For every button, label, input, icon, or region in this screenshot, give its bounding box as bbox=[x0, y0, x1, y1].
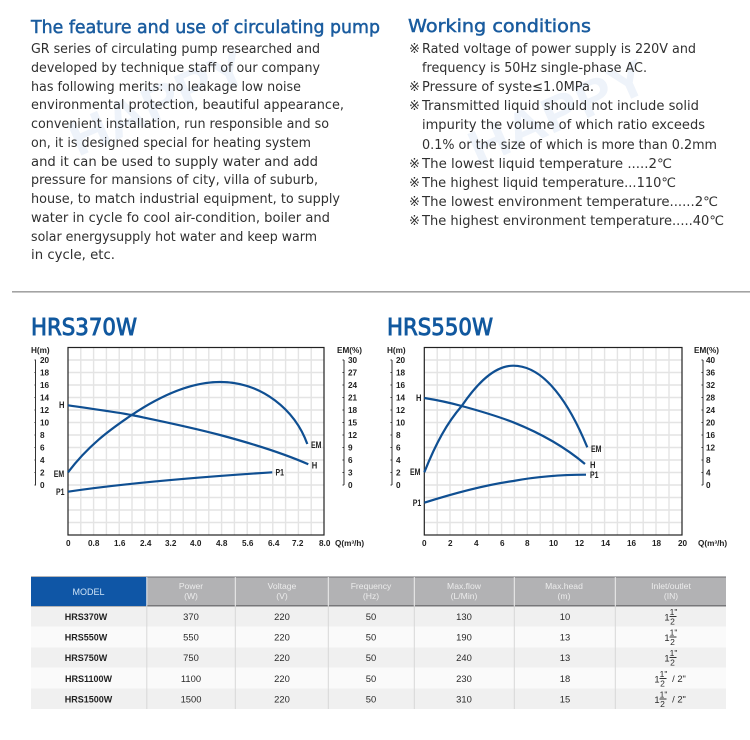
chart: HRS550W performance curves: 18 bbox=[396, 368, 406, 378]
text block: feature description: pressure for mansions of city, villa of suburb, bbox=[31, 173, 318, 188]
text block: feature description: environmental protection, beautiful appearance, bbox=[31, 98, 344, 113]
inlet/outlet fractions: 1" bbox=[670, 648, 677, 658]
text block: working conditions list: ※ bbox=[409, 99, 420, 114]
inlet/outlet fractions: / 2" bbox=[672, 694, 686, 704]
text block: working conditions list: impurity the volume of which ratio exceeds bbox=[422, 118, 705, 133]
chart: HRS370W performance curves: 14 bbox=[40, 394, 50, 402]
chart: HRS550W performance curves: 18 bbox=[652, 539, 662, 548]
table header: (IN) bbox=[664, 591, 678, 601]
chart: HRS550W performance curves: 28 bbox=[706, 394, 716, 402]
chart: HRS370W performance curves: 12 bbox=[348, 431, 358, 440]
chart: HRS550W performance curves: 0 bbox=[706, 481, 711, 490]
chart: HRS550W performance curves: 8 bbox=[396, 431, 401, 440]
table rows: 15 bbox=[560, 694, 570, 704]
chart: HRS370W performance curves bbox=[31, 346, 364, 548]
chart: HRS550W performance curves: P1 bbox=[590, 470, 598, 480]
inlet/outlet fractions: 1" bbox=[660, 669, 667, 679]
chart: HRS550W performance curves: EM(%) bbox=[694, 346, 719, 355]
chart: HRS370W performance curves: H(m) bbox=[31, 346, 50, 355]
table rows: 220 bbox=[274, 632, 290, 642]
chart: HRS370W performance curves: 20 bbox=[40, 356, 50, 365]
table rows: 50 bbox=[366, 632, 376, 642]
P1 curve bbox=[424, 475, 586, 503]
chart: HRS550W performance curves: 10 bbox=[549, 539, 559, 548]
chart: HRS370W performance curves: 4.8 bbox=[216, 539, 228, 548]
chart: HRS550W performance curves: 24 bbox=[706, 406, 716, 415]
table rows: 1100 bbox=[181, 673, 201, 684]
heading: HRS370W: HRS370W bbox=[31, 315, 137, 341]
chart: HRS370W performance curves: 27 bbox=[348, 368, 358, 378]
chart: HRS370W performance curves: 24 bbox=[348, 381, 358, 390]
table rows: 220 bbox=[274, 611, 290, 622]
chart: HRS550W performance curves bbox=[387, 346, 727, 548]
table rows: 50 bbox=[366, 652, 376, 663]
chart: HRS370W performance curves: 18 bbox=[40, 368, 50, 378]
inlet/outlet fractions: 2 bbox=[670, 637, 675, 647]
table header: (W) bbox=[184, 591, 198, 601]
inlet/outlet fractions: 2 bbox=[660, 699, 665, 709]
table rows: HRS370W bbox=[65, 612, 108, 622]
text: HAPPY bbox=[60, 39, 256, 167]
table header: (m) bbox=[558, 591, 571, 601]
table rows: 220 bbox=[274, 652, 290, 663]
heading: feature and use: The feature and use of circulating pump bbox=[30, 17, 380, 38]
chart: HRS370W performance curves: P1 bbox=[56, 487, 64, 497]
table header bbox=[31, 576, 726, 606]
chart: HRS550W performance curves: 8 bbox=[706, 456, 711, 465]
table rows: 190 bbox=[456, 632, 472, 642]
table header: (V) bbox=[276, 591, 288, 601]
chart: HRS370W performance curves: 4 bbox=[40, 456, 45, 465]
chart: HRS370W performance curves: 15 bbox=[348, 418, 358, 428]
inlet/outlet fractions: 1" bbox=[660, 690, 667, 700]
chart: HRS370W performance curves: 9 bbox=[348, 444, 353, 452]
inlet/outlet fractions: 2 bbox=[660, 678, 665, 688]
table rows: 310 bbox=[456, 694, 472, 704]
chart: HRS370W performance curves: 30 bbox=[348, 356, 358, 365]
table header: Frequency bbox=[351, 581, 392, 591]
text block: working conditions list: The lowest liquid temperature .....2℃ bbox=[421, 157, 672, 172]
text block: working conditions list: Pressure of syste≤1.0MPa. bbox=[422, 80, 594, 95]
table rows: 10 bbox=[560, 611, 570, 622]
table header: Max.head bbox=[545, 581, 583, 591]
chart: HRS550W performance curves: 20 bbox=[396, 356, 406, 365]
chart: HRS550W performance curves: 4 bbox=[396, 456, 401, 465]
chart: HRS550W performance curves: 0 bbox=[422, 539, 427, 548]
text block: feature description: solar energysupply hot water and keep warm bbox=[31, 230, 317, 245]
text block: feature description bbox=[31, 42, 344, 263]
text block: working conditions list: Transmitted liquid should not include solid bbox=[421, 99, 699, 114]
chart: HRS550W performance curves: 16 bbox=[706, 431, 716, 440]
chart: HRS370W performance curves: 2 bbox=[40, 468, 45, 478]
table rows: 220 bbox=[274, 694, 290, 704]
table: model specifications bbox=[31, 576, 726, 709]
table rows bbox=[31, 606, 726, 709]
chart: HRS550W performance curves: 36 bbox=[706, 368, 716, 378]
chart: HRS370W performance curves: 0.8 bbox=[88, 539, 100, 548]
EM curve bbox=[68, 382, 307, 472]
inlet/outlet fractions: 1 bbox=[654, 674, 660, 684]
EM curve bbox=[424, 366, 587, 472]
H curve bbox=[68, 405, 308, 464]
chart: HRS370W performance curves: 21 bbox=[348, 394, 358, 402]
chart: HRS370W performance curves: H bbox=[312, 460, 317, 470]
table header: Inlet/outlet bbox=[651, 581, 691, 591]
chart: HRS550W performance curves: H bbox=[416, 393, 422, 403]
chart: HRS550W performance curves: EM bbox=[591, 444, 602, 454]
chart: HRS370W performance curves: 8.0 bbox=[319, 539, 331, 548]
chart: HRS370W performance curves: 3 bbox=[348, 468, 353, 478]
chart: HRS550W performance curves: 14 bbox=[601, 539, 611, 548]
chart: HRS370W performance curves: P1 bbox=[276, 468, 284, 478]
table header: Power bbox=[179, 581, 203, 591]
table rows: HRS1500W bbox=[65, 694, 113, 704]
chart: HRS550W performance curves: H bbox=[590, 460, 596, 470]
chart: HRS370W performance curves: 0 bbox=[348, 481, 353, 490]
chart: HRS550W performance curves: 40 bbox=[706, 356, 716, 365]
chart: HRS550W performance curves: 12 bbox=[575, 539, 585, 548]
chart: HRS550W performance curves: 4 bbox=[706, 468, 711, 478]
text block: working conditions list: 0.1% or the size of which is more than 0.2mm bbox=[422, 138, 717, 153]
text block: feature description: in cycle, etc. bbox=[31, 248, 115, 263]
text block: working conditions list: ※ bbox=[409, 195, 420, 210]
chart: HRS550W performance curves: 6 bbox=[396, 444, 401, 452]
chart: HRS550W performance curves: 14 bbox=[396, 394, 406, 402]
inlet/outlet fractions: / 2" bbox=[672, 673, 686, 684]
table rows: 50 bbox=[366, 694, 376, 704]
chart: HRS550W performance curves: 2 bbox=[448, 539, 453, 548]
inlet/outlet fractions: 1 bbox=[654, 694, 660, 705]
table rows: HRS1100W bbox=[65, 674, 113, 684]
table rows: 13 bbox=[560, 652, 570, 663]
chart: HRS550W performance curves: 12 bbox=[706, 444, 716, 452]
chart: HRS550W performance curves: 20 bbox=[678, 539, 688, 548]
table rows: 220 bbox=[274, 673, 290, 684]
table rows: 370 bbox=[183, 611, 199, 622]
chart: HRS550W performance curves: 4 bbox=[474, 539, 479, 548]
chart: HRS370W performance curves: 5.6 bbox=[242, 539, 254, 548]
table header: Voltage bbox=[268, 581, 297, 591]
table rows: 50 bbox=[366, 611, 376, 622]
inlet/outlet fractions: 1 bbox=[664, 612, 670, 622]
chart: HRS550W performance curves: 32 bbox=[706, 381, 716, 390]
text block: feature description: house, to match industrial equipment, to supply bbox=[31, 192, 340, 207]
text block: working conditions list: ※ bbox=[409, 214, 420, 229]
chart: HRS370W performance curves: 16 bbox=[40, 381, 50, 390]
chart: HRS370W performance curves: 4.0 bbox=[190, 539, 202, 548]
chart: HRS550W performance curves: P1 bbox=[413, 498, 421, 508]
text block: working conditions list: frequency is 50Hz single-phase AC. bbox=[422, 61, 647, 76]
chart: HRS370W performance curves: 6.4 bbox=[268, 539, 280, 548]
text block: feature description: developed by technique staff of our company bbox=[31, 61, 320, 76]
chart: HRS550W performance curves: 20 bbox=[706, 418, 716, 428]
text block: working conditions list: ※ bbox=[409, 176, 420, 191]
chart: HRS550W performance curves: 16 bbox=[396, 381, 406, 390]
heading: HRS550W: HRS550W bbox=[387, 315, 493, 341]
text block: working conditions list: ※ bbox=[409, 80, 420, 95]
inlet/outlet fractions bbox=[654, 607, 686, 709]
chart: HRS370W performance curves: 8 bbox=[40, 431, 45, 440]
P1 curve bbox=[68, 472, 272, 492]
inlet/outlet fractions: 1 bbox=[664, 632, 670, 643]
chart: HRS550W performance curves: 2 bbox=[396, 468, 401, 478]
text block: feature description: on, it is designed special for heating system bbox=[31, 136, 311, 151]
chart: HRS550W performance curves: H(m) bbox=[387, 346, 406, 355]
text block: working conditions list: The lowest environment temperature......2℃ bbox=[421, 195, 718, 210]
table header: (Hz) bbox=[363, 591, 379, 601]
chart: HRS550W performance curves: 16 bbox=[627, 539, 637, 548]
table header: (L/Min) bbox=[451, 591, 478, 601]
chart: HRS370W performance curves: 12 bbox=[40, 406, 50, 415]
inlet/outlet fractions: 1" bbox=[670, 628, 677, 638]
inlet/outlet fractions: 2 bbox=[670, 658, 675, 668]
text block: feature description: convenient installation, run responsible and so bbox=[31, 117, 329, 132]
table header: Max.flow bbox=[447, 581, 482, 591]
inlet/outlet fractions: 2 bbox=[670, 616, 675, 626]
table rows: 130 bbox=[456, 611, 472, 622]
chart: HRS550W performance curves: 6 bbox=[500, 539, 505, 548]
text: HAPPY bbox=[460, 49, 656, 177]
table rows: HRS750W bbox=[65, 653, 108, 663]
chart: HRS370W performance curves: 6 bbox=[40, 444, 45, 452]
table rows: 50 bbox=[366, 673, 376, 684]
table rows: 750 bbox=[183, 652, 199, 663]
chart: HRS370W performance curves: 7.2 bbox=[292, 539, 304, 548]
text block: feature description: has following merits: no leakage low noise bbox=[31, 80, 301, 95]
inlet/outlet fractions: 1 bbox=[664, 652, 670, 664]
chart: HRS370W performance curves: 0 bbox=[66, 539, 71, 548]
chart: HRS370W performance curves: 6 bbox=[348, 456, 353, 465]
table rows: HRS550W bbox=[65, 632, 108, 642]
text block: feature description: and it can be used to supply water and add bbox=[31, 155, 318, 170]
inlet/outlet fractions: 1" bbox=[670, 607, 677, 617]
text block: feature description: water in cycle fo cool air-condition, boiler and bbox=[31, 211, 330, 226]
chart: HRS550W performance curves: 8 bbox=[525, 539, 530, 548]
chart: HRS550W performance curves: 10 bbox=[396, 418, 406, 428]
chart: HRS370W performance curves: 3.2 bbox=[165, 539, 177, 548]
chart: HRS550W performance curves: 12 bbox=[396, 406, 406, 415]
chart: HRS550W performance curves: 0 bbox=[396, 481, 401, 490]
text block: working conditions list bbox=[409, 42, 724, 229]
chart: HRS550W performance curves: Q(m³/h) bbox=[698, 539, 727, 548]
chart: HRS370W performance curves: 1.6 bbox=[114, 539, 126, 548]
text block: working conditions list: Rated voltage of power supply is 220V and bbox=[422, 42, 696, 57]
table rows: 13 bbox=[560, 632, 570, 642]
chart: HRS370W performance curves: EM bbox=[311, 440, 322, 450]
text block: working conditions list: The highest liquid temperature...110℃ bbox=[421, 176, 676, 191]
table rows: 240 bbox=[456, 652, 472, 663]
text block: working conditions list: ※ bbox=[409, 157, 420, 172]
table rows: 230 bbox=[456, 673, 472, 684]
chart: HRS370W performance curves: 18 bbox=[348, 406, 358, 415]
table rows: 18 bbox=[560, 673, 570, 684]
H curve bbox=[424, 398, 585, 464]
chart: HRS370W performance curves: 2.4 bbox=[140, 539, 152, 548]
table rows: 550 bbox=[183, 632, 199, 642]
chart: HRS370W performance curves: 0 bbox=[40, 481, 45, 490]
table rows: 1500 bbox=[181, 694, 201, 704]
heading: working conditions: Working conditions bbox=[408, 16, 591, 37]
text block: working conditions list: ※ bbox=[409, 42, 420, 57]
text block: working conditions list: The highest environment temperature.....40℃ bbox=[421, 214, 724, 229]
chart: HRS370W performance curves: H bbox=[59, 400, 64, 410]
table header: MODEL bbox=[72, 587, 105, 597]
chart: HRS370W performance curves: EM(%) bbox=[337, 346, 362, 355]
chart: HRS370W performance curves: Q(m³/h) bbox=[335, 539, 364, 548]
text block: feature description: GR series of circulating pump researched and bbox=[31, 42, 320, 57]
chart: HRS370W performance curves: EM bbox=[54, 469, 64, 479]
chart: HRS370W performance curves: 10 bbox=[40, 418, 50, 428]
chart: HRS550W performance curves: EM bbox=[410, 467, 420, 477]
